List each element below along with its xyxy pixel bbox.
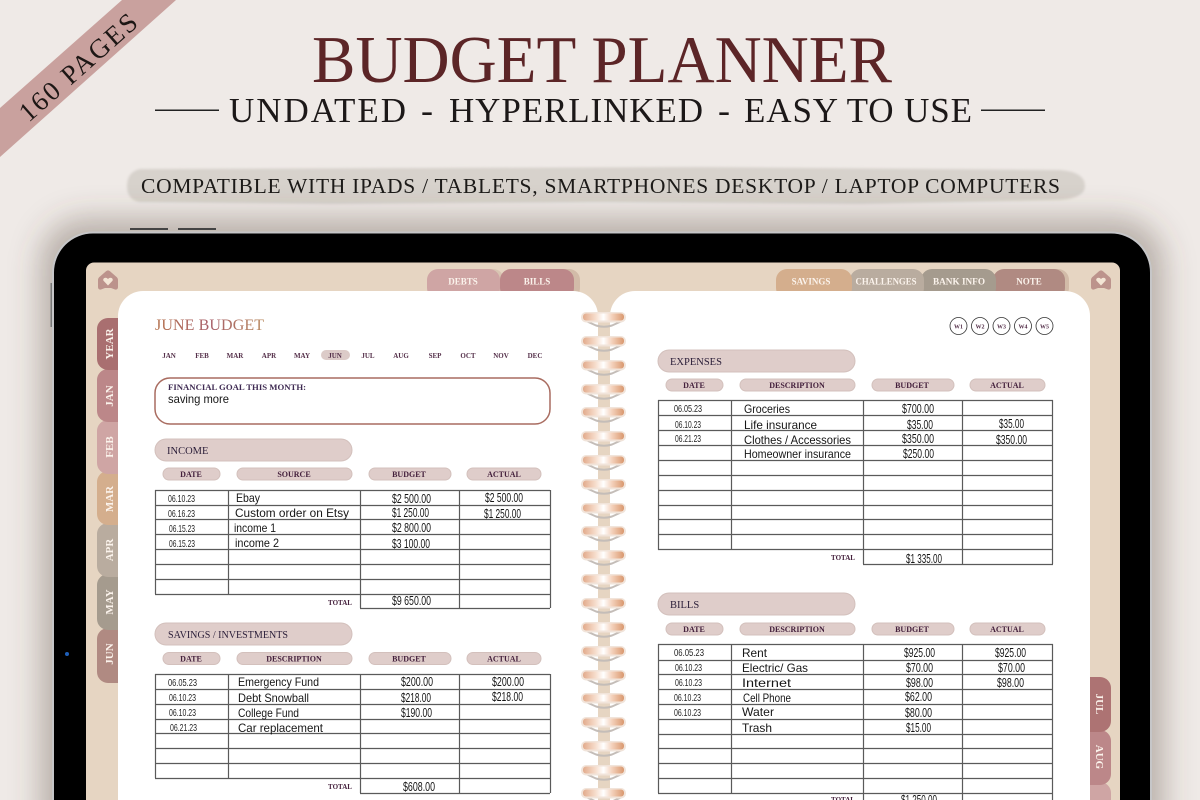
bills section <box>658 593 1053 800</box>
tab: aug: AUG <box>1093 745 1105 770</box>
table rows: Internet <box>742 676 792 690</box>
table rows: Water <box>742 705 774 719</box>
income section <box>155 439 550 608</box>
spiral binding <box>581 312 626 800</box>
financial goal box <box>155 378 550 424</box>
compatibility banner: COMPATIBLE WITH IPADS / TABLETS, SMARTPHONES DESKTOP / LAPTOP COMPUTERS <box>141 174 1060 198</box>
table rows: 06.10.23 <box>675 419 701 431</box>
table rows: $2 500.00 <box>485 491 523 505</box>
heading: income: INCOME <box>167 446 208 457</box>
table rows: 06.05.23 <box>674 647 704 659</box>
column headers: DESCRIPTION <box>769 381 825 390</box>
table rows: $218.00 <box>492 690 523 704</box>
tab: savings <box>776 269 852 299</box>
tab: bills <box>500 269 574 299</box>
tab: feb: FEB <box>104 436 116 458</box>
table rows: $700.00 <box>902 402 934 416</box>
subtitle with side rules: HYPERLINKED <box>449 91 703 130</box>
table rows: $15.00 <box>906 721 931 735</box>
month selector: OCT <box>460 352 476 360</box>
top tabs: left group <box>427 269 580 299</box>
month selector: FEB <box>195 352 209 360</box>
tab: jun <box>97 628 137 683</box>
tab: debts: DEBTS <box>448 276 478 286</box>
subtitle with side rules: UNDATED <box>229 91 406 130</box>
table rows: $2 500.00 <box>392 492 431 506</box>
table rows: $80.00 <box>905 706 932 720</box>
table rows: $190.00 <box>401 706 432 720</box>
table rows <box>674 646 1026 735</box>
column headers: DATE <box>180 654 202 664</box>
financial goal box: FINANCIAL GOAL THIS MONTH: <box>168 382 306 392</box>
table rows: 06.10.23 <box>675 677 702 689</box>
compatibility banner <box>127 167 1085 204</box>
table rows: $62.00 <box>905 690 932 704</box>
table rows: $925.00 <box>995 646 1026 660</box>
total <box>328 594 431 608</box>
icon: home right <box>1091 270 1111 290</box>
tab: note <box>993 269 1065 299</box>
table rows: income 1 <box>234 521 276 535</box>
column headers: DATE <box>683 625 705 634</box>
table rows: $200.00 <box>401 675 433 689</box>
column headers: BUDGET <box>392 654 427 664</box>
heading: income <box>155 439 352 461</box>
table rows: $98.00 <box>997 676 1024 690</box>
table rows: Emergency Fund <box>238 675 319 689</box>
tab: sep <box>1070 782 1111 800</box>
total <box>831 552 942 566</box>
tab: debts <box>427 269 500 299</box>
heading: savings / investments: SAVINGS / INVESTMENTS <box>168 630 288 641</box>
table rows <box>168 491 523 551</box>
column headers: ACTUAL <box>990 625 1024 634</box>
tab: challenges: CHALLENGES <box>856 276 916 286</box>
month selector: JUN <box>328 352 342 360</box>
column headers: DESCRIPTION <box>769 625 825 634</box>
left page <box>118 291 598 800</box>
month selector <box>162 350 542 360</box>
table rows: Car replacement <box>238 721 324 735</box>
total: $608.00 <box>403 780 435 794</box>
side tabs: months right <box>1070 677 1111 800</box>
table rows: $1 250.00 <box>484 507 521 521</box>
table rows: Rent <box>742 646 768 660</box>
table grid <box>155 490 550 608</box>
ribbon: 160 pages <box>0 0 176 157</box>
tab: may <box>97 574 137 630</box>
total <box>831 794 937 800</box>
tab: may: MAY <box>104 589 116 615</box>
month selector: NOV <box>493 352 509 360</box>
month selector: DEC <box>528 352 542 360</box>
table rows: Ebay <box>236 491 260 505</box>
page heading: june budget: JUNE BUDGET <box>155 317 264 334</box>
tab: bank info <box>921 269 996 299</box>
title: BUDGET PLANNER <box>312 23 892 97</box>
table rows: Homeowner insurance <box>744 447 851 461</box>
table rows: $35.00 <box>907 418 933 432</box>
heading: bills <box>658 593 855 615</box>
week selector: W5 <box>1040 324 1049 330</box>
week selector: W4 <box>1018 324 1028 330</box>
tab: jan <box>97 369 137 422</box>
month selector: JAN <box>162 352 176 360</box>
heading: expenses: EXPENSES <box>670 357 722 368</box>
table rows: 06.16.23 <box>168 508 195 520</box>
table rows: income 2 <box>235 536 279 550</box>
month selector: MAR <box>227 352 244 360</box>
week selector: W3 <box>997 324 1006 330</box>
total: $1 335.00 <box>906 552 942 566</box>
table rows: Trash <box>742 721 772 735</box>
ribbon: 160 pages: 160 PAGES <box>13 7 143 128</box>
total: TOTAL <box>831 554 855 562</box>
tab: apr <box>97 523 137 577</box>
table rows: 06.10.23 <box>675 662 702 674</box>
tab: year <box>97 318 137 370</box>
column headers: DATE <box>683 381 705 390</box>
month selector: APR <box>262 352 277 360</box>
table rows: 06.21.23 <box>675 433 701 445</box>
heading: savings / investments <box>155 623 352 645</box>
table rows: Life insurance <box>744 418 817 432</box>
tab: mar <box>97 471 137 525</box>
table rows: Clothes / Accessories <box>744 433 851 447</box>
tab: savings: SAVINGS <box>792 276 830 286</box>
tab: mar: MAR <box>104 485 116 512</box>
financial goal box: saving more <box>168 392 229 406</box>
table rows: Groceries <box>744 402 790 416</box>
table rows: College Fund <box>238 706 299 720</box>
table rows: $70.00 <box>906 661 933 675</box>
table rows: $35.00 <box>999 417 1024 431</box>
tablet shadow <box>40 218 1164 800</box>
column headers: BUDGET <box>895 381 930 390</box>
table rows: $200.00 <box>492 675 524 689</box>
column headers: SOURCE <box>277 470 311 479</box>
tab: jun: JUN <box>104 643 116 665</box>
table rows: $218.00 <box>401 691 431 705</box>
tab: jul: JUL <box>1093 694 1105 714</box>
tab: feb <box>97 420 137 474</box>
column headers: BUDGET <box>895 625 930 634</box>
table rows: Custom order on Etsy <box>235 506 349 520</box>
column headers <box>163 652 541 664</box>
tab: note: NOTE <box>1016 276 1042 286</box>
tab: year: YEAR <box>104 327 116 360</box>
month selector: AUG <box>393 352 409 360</box>
icon: home left <box>98 270 118 290</box>
table rows: 06.10.23 <box>169 707 196 719</box>
column headers: DATE <box>180 470 202 479</box>
heading: expenses <box>658 350 855 372</box>
subtitle with side rules: - <box>421 91 433 130</box>
table rows <box>168 675 524 735</box>
table rows: $3 100.00 <box>392 537 430 551</box>
table grid <box>658 400 1053 564</box>
table rows: Electric/ Gas <box>742 661 808 675</box>
column headers <box>666 623 1045 635</box>
total: TOTAL <box>328 783 352 791</box>
table rows: $350.00 <box>996 433 1027 447</box>
table rows: $1 250.00 <box>392 506 429 520</box>
table rows: 06.05.23 <box>674 403 702 415</box>
week selector <box>950 318 1053 334</box>
month selector: JUL <box>361 352 375 360</box>
table rows: $250.00 <box>903 447 934 461</box>
table rows: 06.05.23 <box>168 677 197 689</box>
week selector: W2 <box>976 324 984 330</box>
table rows: $925.00 <box>904 646 935 660</box>
total: TOTAL <box>328 599 352 607</box>
tab: challenges <box>850 269 924 299</box>
tab: jan: JAN <box>104 385 116 407</box>
week selector: W1 <box>954 324 963 330</box>
table rows: 06.10.23 <box>168 493 195 505</box>
subtitle with side rules <box>155 91 1045 130</box>
total <box>328 780 435 794</box>
table rows <box>674 402 1027 461</box>
table rows: 06.15.23 <box>169 538 195 550</box>
month selector: SEP <box>429 352 442 360</box>
side tabs: months left <box>97 318 137 683</box>
right page <box>610 291 1090 800</box>
tab: bank info: BANK INFO <box>933 276 985 286</box>
table rows: $2 800.00 <box>392 521 431 535</box>
table rows: $350.00 <box>902 432 934 446</box>
tab: bills: BILLS <box>524 276 550 286</box>
table rows: Cell Phone <box>743 691 791 705</box>
expenses section <box>658 350 1053 566</box>
total: $9 650.00 <box>392 594 431 608</box>
tab: apr: APR <box>104 538 116 561</box>
table rows: $98.00 <box>906 676 933 690</box>
subtitle with side rules: - <box>718 91 730 130</box>
tablet device <box>50 228 1151 800</box>
table rows: 06.10.23 <box>674 692 701 704</box>
heading: bills: BILLS <box>670 600 699 611</box>
column headers: ACTUAL <box>990 381 1024 390</box>
top tabs: right group <box>776 269 1069 299</box>
subtitle with side rules: EASY TO USE <box>744 91 972 130</box>
column headers: ACTUAL <box>487 470 521 479</box>
savings and investments section <box>155 623 550 794</box>
table rows: Debt Snowball <box>238 691 309 705</box>
column headers: BUDGET <box>392 470 427 479</box>
column headers <box>163 468 541 480</box>
column headers <box>666 379 1045 391</box>
column headers: DESCRIPTION <box>266 654 322 664</box>
table grid <box>658 644 1053 800</box>
table grid <box>155 674 550 794</box>
table rows: 06.10.23 <box>674 707 701 719</box>
table rows: $70.00 <box>998 661 1025 675</box>
month selector: MAY <box>294 352 310 360</box>
table rows: 06.21.23 <box>170 722 197 734</box>
column headers: ACTUAL <box>487 654 521 664</box>
table rows: 06.10.23 <box>169 692 196 704</box>
table rows: 06.15.23 <box>169 523 195 535</box>
